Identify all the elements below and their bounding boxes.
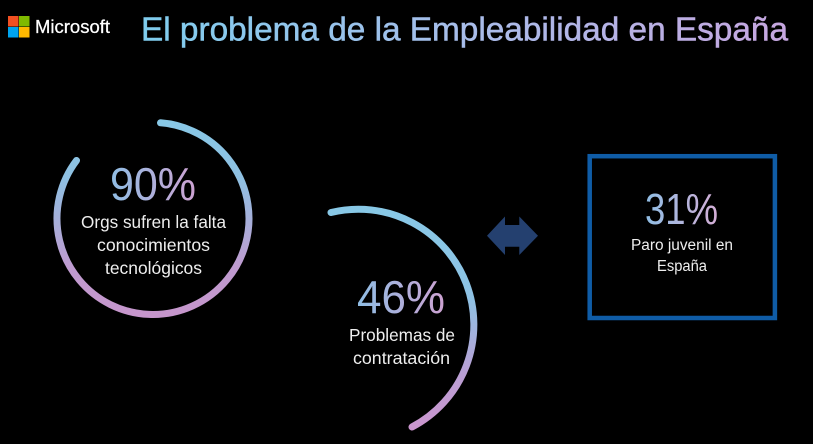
number: 46%: 46% — [357, 271, 445, 323]
Microsoft logo: Microsoft — [35, 17, 110, 37]
text: falta de conocimientos: tecnológicos — [105, 258, 202, 278]
text: falta de conocimientos: conocimientos — [97, 235, 210, 255]
number: 90%: 90% — [110, 158, 196, 210]
text: falta de conocimientos: Orgs sufren la falta — [81, 212, 226, 232]
text: paro juvenil: Paro juvenil en — [631, 237, 733, 254]
panel: 46% arc stat — [331, 209, 474, 427]
text: problemas de contratación — [349, 325, 455, 368]
arrow: double-headed — [487, 216, 538, 255]
title: El problema de la Empleabilidad en España — [141, 12, 788, 48]
Microsoft logo — [8, 16, 110, 38]
number: 31%: 31% — [645, 185, 718, 234]
panel: 31% box stat — [590, 156, 775, 318]
ring: 90% — [57, 123, 249, 315]
text: problemas de contratación: contratación — [353, 348, 450, 368]
box frame — [590, 156, 775, 318]
text: paro juvenil: España — [657, 258, 707, 275]
text: paro juvenil — [631, 237, 733, 275]
arc: 46% — [331, 209, 474, 427]
panel: 90% ring stat — [57, 123, 249, 315]
text: problemas de contratación: Problemas de — [349, 325, 455, 345]
text: falta de conocimientos — [81, 212, 226, 278]
